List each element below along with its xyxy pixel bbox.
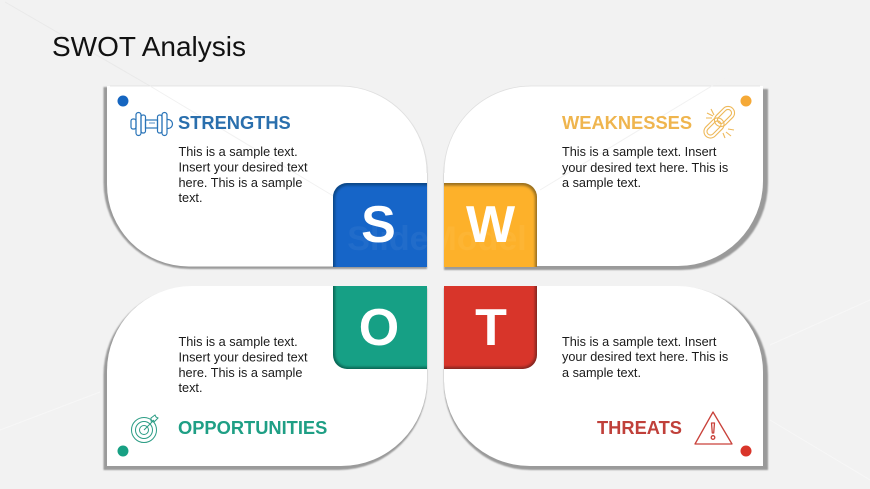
heading: strengths: STRENGTHS	[178, 112, 291, 133]
text: opportunities: here. This is a sample	[178, 366, 302, 380]
text: opportunities: This is a sample text.	[178, 335, 298, 349]
panel: weaknesses	[444, 75, 768, 270]
text: strengths: here. This is a sample	[178, 176, 302, 190]
text: threats: a sample text.	[562, 366, 641, 380]
text: strengths: Insert your desired text	[178, 160, 308, 174]
text: weaknesses: This is a sample text. Insert	[562, 145, 717, 159]
tile: T: T	[475, 299, 507, 357]
tile: T	[444, 286, 537, 369]
tile: O: O	[359, 299, 399, 357]
panel: threats	[444, 286, 768, 470]
heading: weaknesses: WEAKNESSES	[562, 112, 692, 133]
icon: broken chain	[701, 104, 737, 141]
dot: opportunities	[118, 446, 128, 456]
panel: opportunities	[103, 286, 427, 470]
icon: target	[132, 415, 158, 442]
text: strengths: This is a sample text.	[178, 145, 298, 159]
heading: threats: THREATS	[597, 417, 682, 438]
icon: dumbbell	[131, 112, 172, 136]
heading: opportunities: OPPORTUNITIES	[178, 417, 327, 438]
text: opportunities: Insert your desired text	[178, 350, 308, 364]
tile: S	[333, 183, 427, 267]
watermark: SlideModel	[347, 220, 527, 258]
dot: weaknesses	[740, 96, 752, 106]
tile: S: S	[361, 196, 396, 254]
icon: warning triangle	[695, 412, 732, 444]
tile: W: W	[466, 196, 516, 254]
panel: strengths	[104, 86, 427, 269]
dot: threats	[740, 446, 752, 456]
text: strengths: text.	[178, 191, 202, 205]
title: SWOT Analysis	[52, 31, 246, 62]
text: weaknesses: a sample text.	[562, 176, 641, 190]
text: threats: This is a sample text. Insert	[562, 335, 717, 349]
text: weaknesses: your desired text here. This is	[562, 161, 728, 175]
tile: O	[333, 286, 427, 369]
text: threats: your desired text here. This is	[562, 350, 728, 364]
tile: W	[444, 183, 537, 267]
dot: strengths	[118, 96, 128, 106]
text: opportunities: text.	[178, 381, 202, 395]
